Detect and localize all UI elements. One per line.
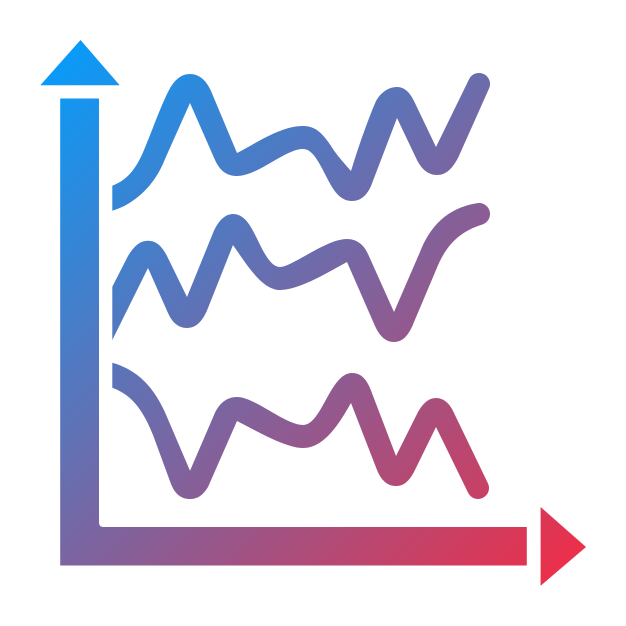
line: top series bbox=[112, 73, 490, 211]
axes bbox=[40, 40, 586, 586]
line: middle series bbox=[112, 203, 490, 342]
data lines bbox=[112, 73, 490, 499]
axis: L-shaped shaft bbox=[60, 98, 527, 566]
arrow: x axis head bbox=[541, 507, 586, 586]
line: bottom series bbox=[112, 363, 489, 499]
arrow: y axis head bbox=[40, 40, 120, 85]
